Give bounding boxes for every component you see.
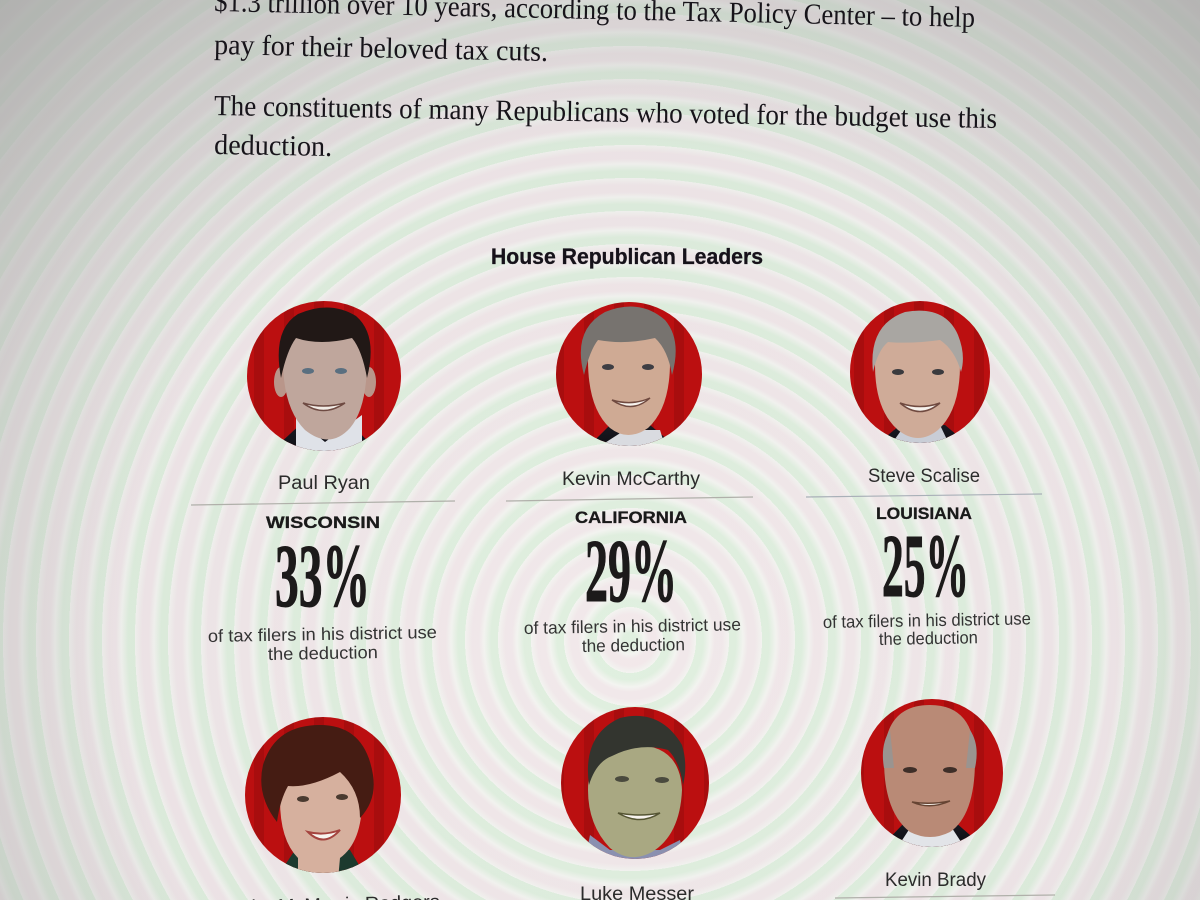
article text: pay for their beloved tax cuts. <box>214 29 548 68</box>
caption: California: the deduction <box>582 634 685 656</box>
state: Wisconsin: WISCONSIN <box>266 513 380 532</box>
heading: House Republican Leaders <box>491 244 763 269</box>
article text: deduction. <box>214 129 332 163</box>
caption: California: of tax filers in his district use <box>524 614 741 638</box>
portrait: Luke Messer <box>561 707 709 859</box>
stat: 33%: 33% <box>275 527 370 626</box>
caption: Louisiana <box>823 608 1031 649</box>
name: Paul Ryan: Paul Ryan <box>278 473 370 494</box>
portrait: Paul Ryan <box>247 301 401 451</box>
caption: Wisconsin <box>208 622 437 664</box>
caption: Louisiana: the deduction <box>879 627 978 649</box>
state: California: CALIFORNIA <box>575 508 687 527</box>
name: Kevin McCarthy: Kevin McCarthy <box>562 469 700 490</box>
portrait: Kevin Brady <box>861 699 1003 847</box>
name: Steve Scalise: Steve Scalise <box>868 466 980 487</box>
article text: The constituents of many Republicans who voted for the budget use this <box>214 90 997 135</box>
portrait: Kevin McCarthy <box>556 302 702 446</box>
article text <box>214 0 997 163</box>
caption: Louisiana: of tax filers in his district use <box>823 608 1031 632</box>
text: 25% <box>882 517 969 616</box>
state: Louisiana: LOUISIANA <box>876 504 972 523</box>
caption: Wisconsin: of tax filers in his district use <box>208 622 437 646</box>
name: Kevin Brady: Kevin Brady <box>885 870 986 891</box>
portrait: Cathy McMorris Rodgers <box>245 717 401 873</box>
caption: Wisconsin: the deduction <box>268 642 378 664</box>
portrait: Steve Scalise <box>850 301 990 443</box>
stat: 29%: 29% <box>585 522 677 621</box>
caption: California <box>524 614 741 656</box>
